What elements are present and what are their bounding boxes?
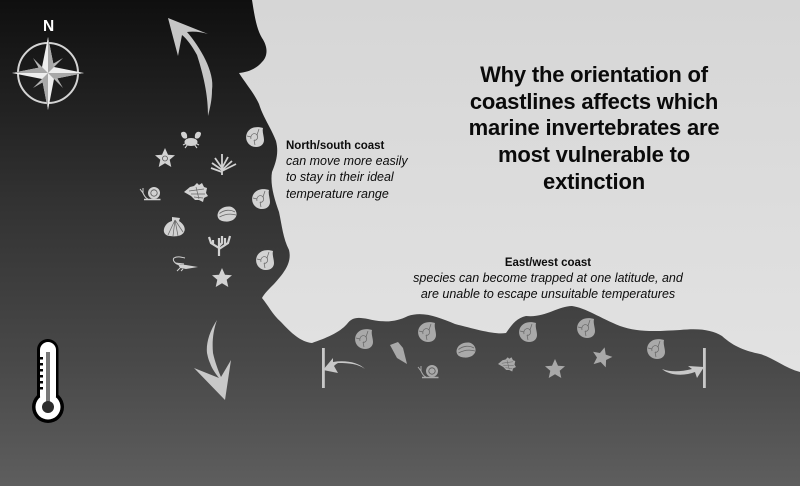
east/west coast text: are unable to escape unsuitable temperatures — [421, 287, 675, 301]
icon: shell — [355, 329, 373, 349]
icon: shell — [577, 318, 595, 338]
east barrier and arrow — [662, 348, 706, 388]
icon: clam — [456, 342, 476, 358]
icon: starfish — [155, 148, 175, 167]
north/south coast creatures — [140, 127, 274, 287]
arrow: north — [168, 18, 212, 116]
icon: crab — [181, 132, 201, 148]
west barrier and arrow — [322, 348, 365, 388]
icon: shell — [252, 189, 270, 209]
title: marine invertebrates are — [469, 115, 719, 140]
icon: clam — [218, 206, 237, 222]
icon: shell — [246, 127, 264, 147]
north/south coast text: North/south coast — [286, 140, 384, 152]
title — [469, 62, 719, 194]
north/south coast text — [286, 140, 408, 201]
icon: starfish — [590, 345, 614, 368]
north/south coast text: can move more easily — [286, 154, 408, 168]
east/west coast text — [413, 257, 684, 301]
compass rose — [12, 37, 84, 110]
icon: shell — [519, 322, 537, 342]
icon: starfish — [212, 268, 232, 287]
icon: scallop — [164, 217, 185, 236]
icon: conch — [184, 183, 208, 202]
icon: sea fan — [211, 154, 236, 175]
land — [239, 0, 800, 372]
north/south coast text: temperature range — [286, 187, 389, 201]
icon: shell — [647, 339, 665, 359]
title: most vulnerable to — [498, 142, 690, 167]
east/west coast text: East/west coast — [505, 257, 591, 269]
icon: shell — [256, 250, 274, 270]
north/south coast text: to stay in their ideal — [286, 170, 394, 184]
east/west coast text: species can become trapped at one latitude, and — [413, 271, 683, 285]
icon: cone shell — [390, 342, 407, 364]
icon: scorpion — [173, 257, 198, 271]
icon: shell — [418, 322, 436, 342]
thermometer icon — [32, 339, 64, 423]
east/west coast creatures — [355, 318, 665, 378]
icon: snail — [418, 365, 438, 378]
icon: starfish — [545, 359, 565, 378]
title: extinction — [543, 169, 645, 194]
title: Why the orientation of — [480, 62, 708, 87]
icon: conch — [498, 357, 516, 372]
arrow: south — [194, 320, 231, 400]
icon: snail — [140, 187, 160, 200]
title: coastlines affects which — [470, 89, 718, 114]
icon: coral — [209, 236, 230, 256]
compass north label: N — [43, 18, 54, 35]
